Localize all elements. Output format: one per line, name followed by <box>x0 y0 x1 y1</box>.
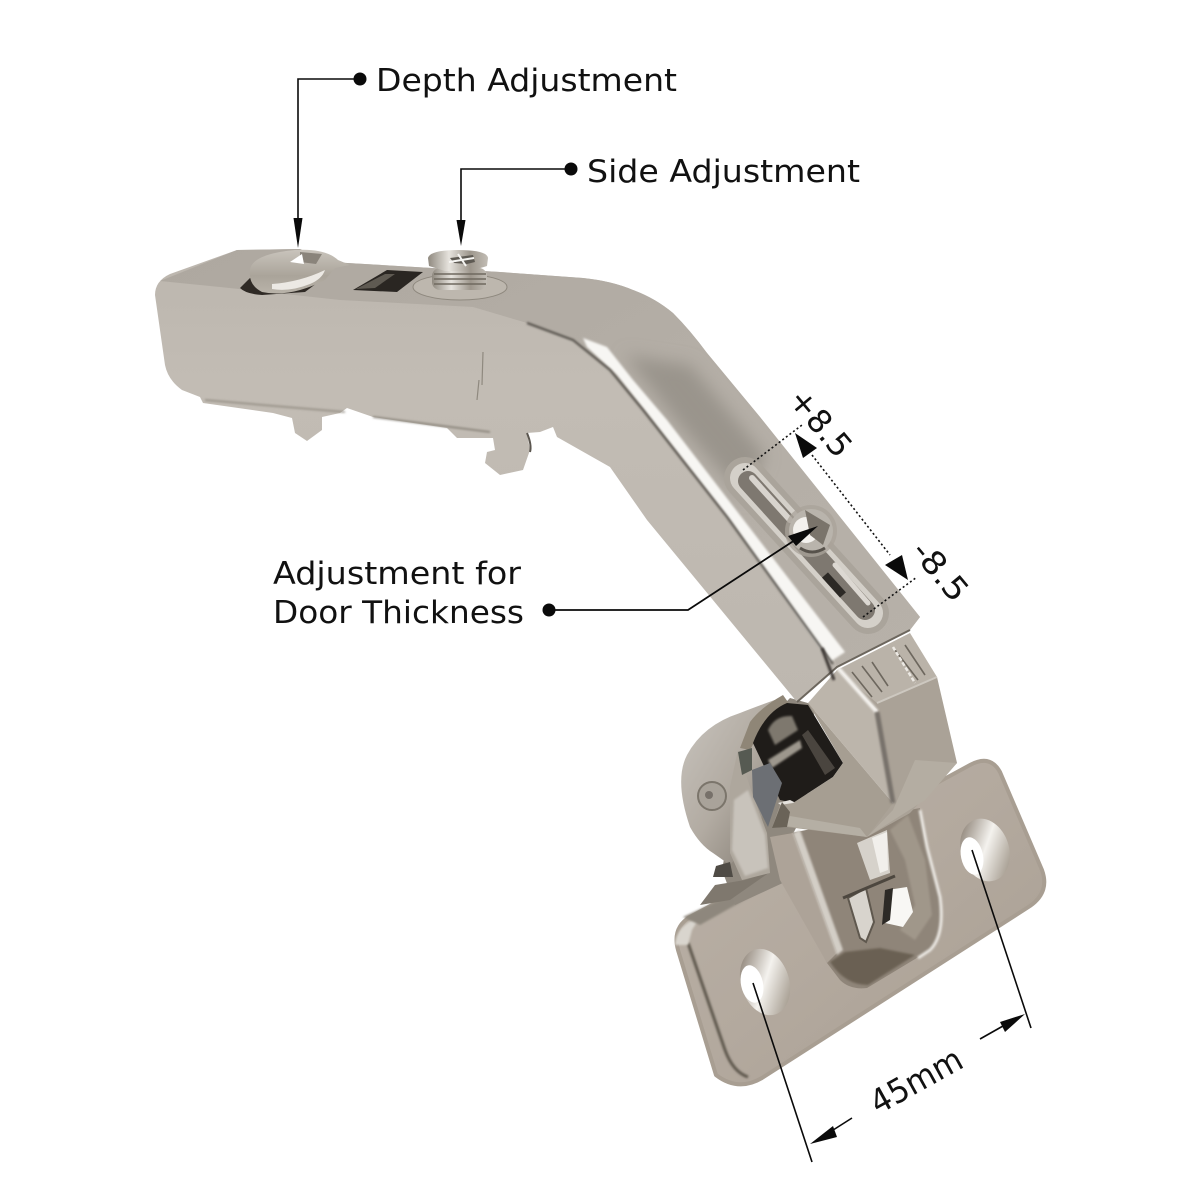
tab <box>848 888 874 942</box>
side adjustment screw <box>413 250 507 300</box>
depth adjustment screw <box>240 250 350 295</box>
arrowhead left <box>810 1126 837 1144</box>
arrowhead down <box>885 555 908 580</box>
recess in plate <box>770 808 941 988</box>
cup backing <box>722 698 815 905</box>
hinge arm and body <box>155 249 920 702</box>
label: -8.5: -8.5 <box>904 533 977 609</box>
screw hole left <box>732 942 798 1022</box>
label: door thickness: Adjustment for <box>273 556 521 592</box>
bright window <box>885 887 913 927</box>
screw hole right <box>952 812 1018 888</box>
callout: door thickness adjustment <box>273 526 818 631</box>
spring strip <box>857 830 890 880</box>
arrowhead up <box>795 433 817 458</box>
label: door thickness: Door Thickness <box>273 595 524 631</box>
top face <box>160 249 920 667</box>
label: 45mm: 45mm <box>863 1039 969 1122</box>
callout: depth adjustment <box>294 63 677 248</box>
arrowhead right <box>1000 1014 1025 1032</box>
dimension: plus minus 8.5 travel <box>743 381 977 617</box>
mounting plate <box>675 761 1044 1084</box>
label: depth adjustment: Depth Adjustment <box>376 63 677 99</box>
hinge link and cavity <box>730 695 843 880</box>
label: side adjustment: Side Adjustment <box>587 154 860 190</box>
plastic part <box>752 763 782 827</box>
pivot housing <box>772 703 910 837</box>
callout: side adjustment <box>456 154 860 246</box>
dimension: 45mm hole spacing <box>753 850 1031 1162</box>
label: +8.5: +8.5 <box>781 381 860 465</box>
hinge illustration <box>155 249 1044 1084</box>
window slot <box>353 270 423 292</box>
cup dome <box>681 697 783 905</box>
knuckle section <box>808 633 957 837</box>
highlight strip <box>583 338 845 662</box>
door thickness slot <box>745 478 868 613</box>
label: door thickness <box>273 556 524 631</box>
